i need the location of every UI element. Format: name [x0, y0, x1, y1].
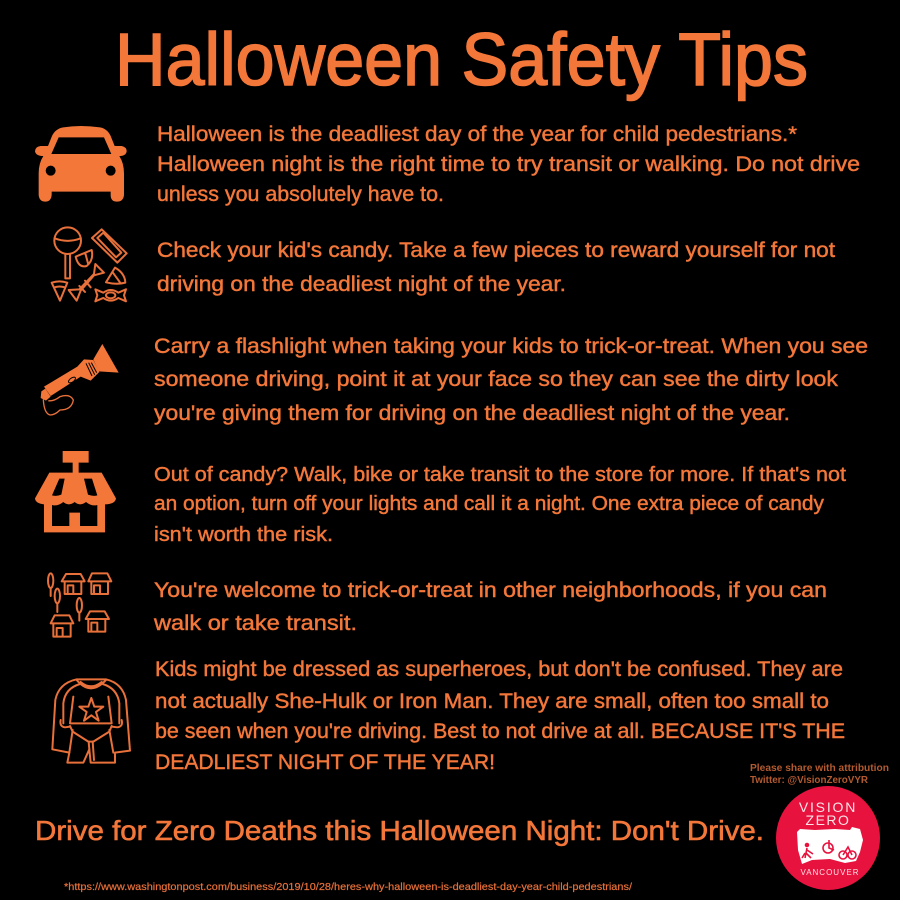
panel: tip 3 flashlight [41, 335, 868, 425]
tip 3 text: someone driving, point it at your face so they can see the dirty look [154, 368, 839, 391]
tip 1 text: unless you absolutely have to. [157, 183, 444, 206]
icon: store [35, 451, 116, 532]
tip 1 text [157, 123, 860, 206]
tip 5 text: walk or take transit. [153, 612, 357, 635]
icon: candy [52, 227, 127, 301]
tip 5 text: You're welcome to trick-or-treat in other neighborhoods, if you can [154, 579, 827, 602]
tip 5 text [153, 579, 827, 635]
panel: tip 4 store [35, 451, 846, 546]
tip 4 text: Out of candy? Walk, bike or take transit to the store for more. If that's not [154, 464, 846, 486]
panel: tip 6 superheroes [52, 658, 845, 774]
tip 2 text: driving on the deadliest night of the year. [157, 273, 566, 296]
tip 4 text: an option, turn off your lights and call it a night. One extra piece of candy [154, 493, 824, 515]
logo: Vision Zero Vancouver: VISION [799, 799, 857, 815]
tip 6 text: be seen when you're driving. Best to not drive at all. BECAUSE IT'S THE [155, 720, 845, 743]
tip 6 text: Kids might be dressed as superheroes, but don't be confused. They are [155, 658, 843, 681]
panel: tip 2 check candy [52, 227, 835, 301]
panel: tip 1 do not drive [35, 123, 860, 206]
attribution note: Twitter: @VisionZeroVYR [750, 774, 868, 786]
tip 1 text: Halloween is the deadliest day of the year for child pedestrians.* [157, 123, 797, 146]
tip 1 text: Halloween night is the right time to try transit or walking. Do not drive [157, 153, 860, 176]
icon: flashlight [41, 344, 119, 415]
tip 6 text: not actually She-Hulk or Iron Man. They are small, often too small to [155, 690, 829, 713]
icon: neighborhood [48, 573, 111, 637]
tip 4 text: isn't worth the risk. [154, 524, 333, 546]
closing message: Drive for Zero Deaths this Halloween Night: Don't Drive. [35, 815, 764, 846]
logo: Vision Zero Vancouver: ZERO [806, 812, 850, 828]
source link: *https://www.washingtonpost.com/business/2019/10/28/heres-why-halloween-is-deadliest-day-year-child-pedestrians/ [64, 881, 632, 893]
logo: Vision Zero Vancouver [776, 786, 880, 890]
attribution note [750, 762, 889, 786]
icon: car [35, 126, 127, 202]
tip 6 text: DEADLIEST NIGHT OF THE YEAR! [155, 751, 495, 774]
icon: superhero costume [52, 679, 130, 763]
title: Halloween Safety Tips [115, 18, 808, 101]
tip 2 text [157, 239, 835, 296]
attribution note: Please share with attribution [750, 762, 889, 774]
tip 4 text [154, 464, 846, 546]
logo: Vision Zero Vancouver: VANCOUVER [800, 868, 860, 877]
tip 3 text: Carry a flashlight when taking your kids to trick-or-treat. When you see [154, 335, 868, 358]
tip 3 text: you're giving them for driving on the deadliest night of the year. [154, 402, 790, 425]
tip 2 text: Check your kid's candy. Take a few pieces to reward yourself for not [157, 239, 835, 262]
tip 6 text [155, 658, 845, 774]
tip 3 text [154, 335, 868, 425]
panel: tip 5 neighborhoods [48, 573, 827, 637]
